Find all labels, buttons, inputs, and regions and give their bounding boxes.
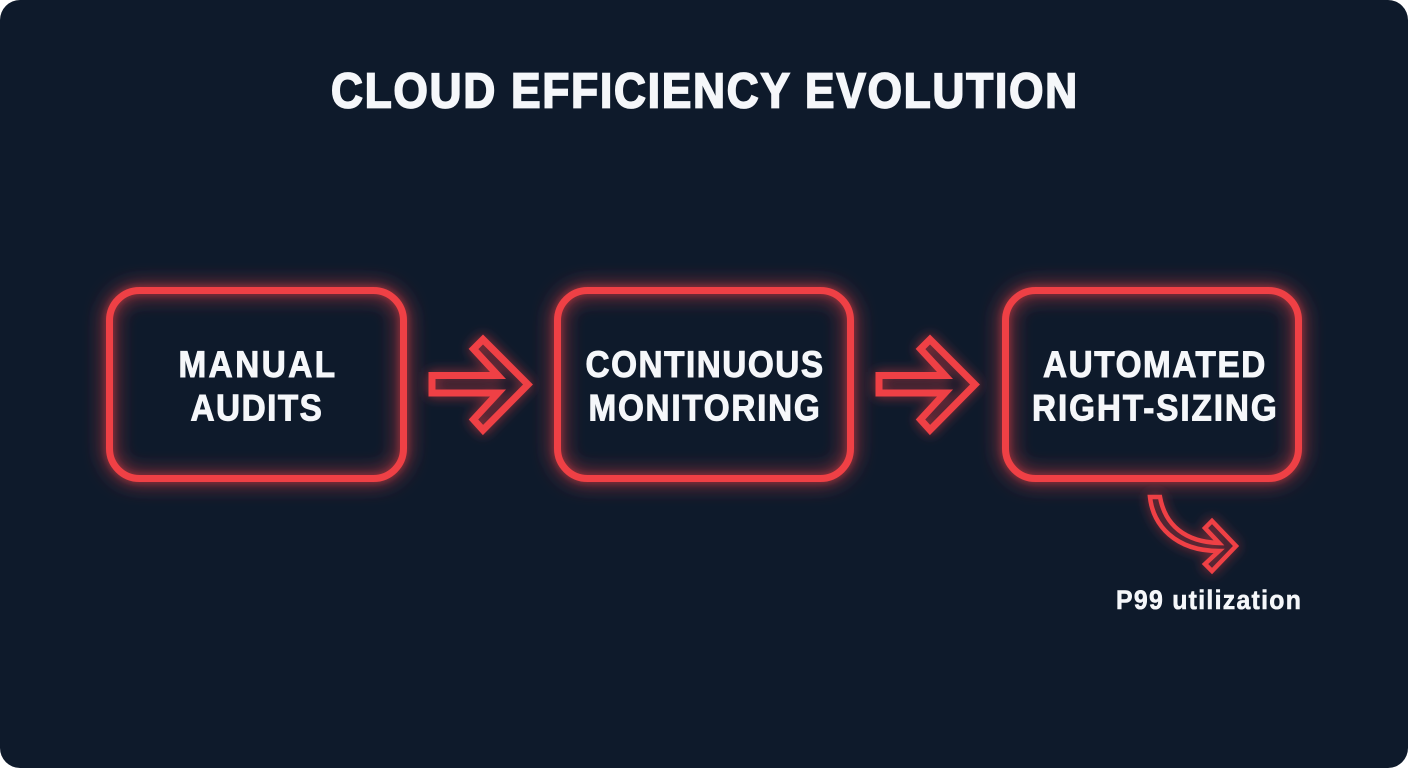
- panel: manual audits: [110, 290, 404, 478]
- arrow: manual audits to continuous monitoring: [432, 340, 528, 430]
- panel: continuous monitoring: [558, 290, 850, 478]
- panel: automated right-sizing: [1006, 290, 1298, 478]
- panel: continuous monitoring: MONITORING: [588, 388, 820, 429]
- arrow: continuous monitoring to automated right-sizing: [879, 340, 975, 430]
- arrow: curved to P99 utilization: [1150, 497, 1236, 571]
- panel: manual audits: MANUAL: [178, 344, 335, 385]
- label: P99 utilization: P99 utilization: [1116, 586, 1301, 615]
- panel: automated right-sizing: AUTOMATED: [1043, 344, 1265, 385]
- panel: continuous monitoring: CONTINUOUS: [586, 344, 823, 385]
- panel: manual audits: AUDITS: [190, 388, 322, 429]
- title: CLOUD EFFICIENCY EVOLUTION: [331, 63, 1077, 118]
- panel: automated right-sizing: RIGHT-SIZING: [1032, 388, 1277, 429]
